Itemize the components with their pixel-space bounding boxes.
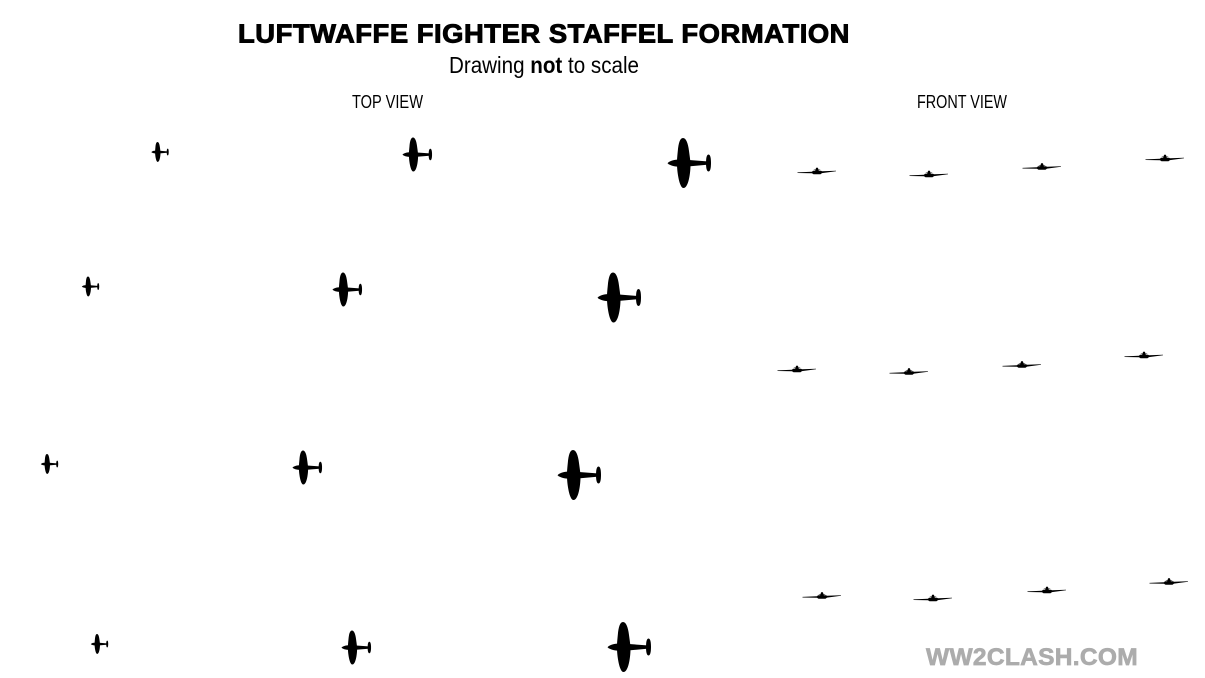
- plane: front view row 3: [802, 578, 1188, 601]
- heading: front view: FRONT VIEW: [917, 92, 1007, 112]
- plane: top view large column: [558, 138, 711, 672]
- heading: top view: TOP VIEW: [352, 92, 423, 112]
- subtitle: Drawing not to scale: [449, 52, 639, 78]
- plane: front view row 2: [778, 352, 1163, 375]
- plane: front view row 1: [798, 155, 1184, 177]
- plane: top view small column: [41, 142, 169, 654]
- plane: top view medium column: [292, 138, 432, 664]
- front view formation: [778, 155, 1188, 601]
- top view formation: [41, 138, 711, 672]
- title: LUFTWAFFE FIGHTER STAFFEL FORMATION: [238, 18, 850, 48]
- watermark: WW2CLASH.COM: [926, 644, 1138, 671]
